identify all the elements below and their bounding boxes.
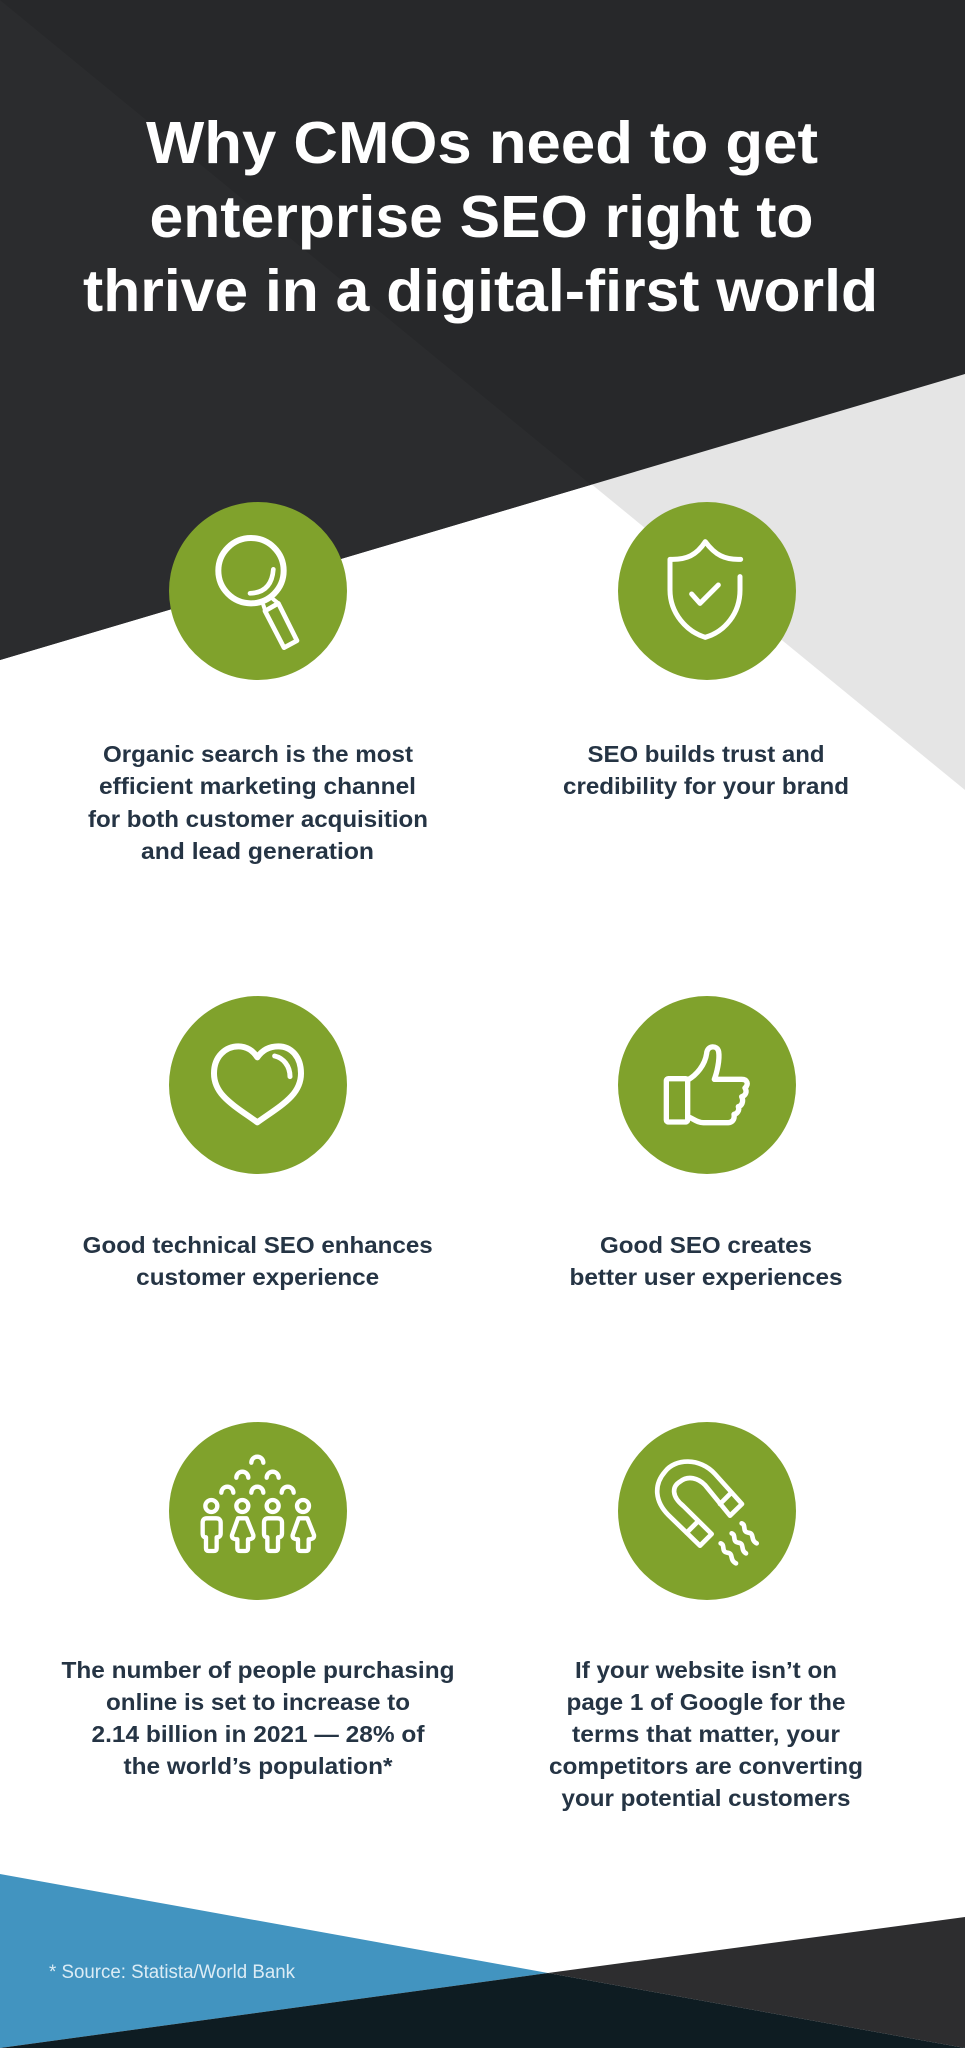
text: user experiences: better user experiences — [570, 1264, 842, 1290]
icon: thumbs up — [666, 1047, 747, 1123]
text: organic search — [88, 741, 428, 864]
text: organic search: Organic search is the most — [103, 741, 413, 767]
text: technical SEO: customer experience — [136, 1264, 379, 1290]
panel: organic search — [88, 502, 428, 864]
icon: magnifying glass — [218, 538, 297, 648]
panel: user experiences — [570, 996, 842, 1290]
text: technical SEO: Good technical SEO enhances — [83, 1232, 433, 1258]
title: Why CMOs need to get — [146, 110, 818, 176]
source note: * Source: Statista/World Bank — [49, 1962, 295, 1983]
text: organic search: and lead generation — [141, 838, 374, 864]
title: thrive in a digital-first world — [83, 258, 878, 324]
text: Google page 1: competitors are converting — [549, 1753, 863, 1779]
text: Google page 1: If your website isn’t on — [575, 1657, 837, 1683]
text: user experiences: Good SEO creates — [600, 1232, 812, 1258]
panel: online purchasers — [62, 1422, 454, 1779]
text: online purchasers: online is set to increase to — [106, 1689, 410, 1715]
panel: trust and credibility — [563, 502, 849, 799]
text: trust and credibility: credibility for your brand — [563, 773, 849, 799]
text: Google page 1: terms that matter, your — [572, 1721, 840, 1747]
text: organic search: efficient marketing channel — [99, 773, 416, 799]
panel: Google page 1 — [549, 1422, 863, 1811]
text: trust and credibility — [563, 741, 849, 799]
text: user experiences — [570, 1232, 842, 1290]
icon: shield with check — [670, 542, 741, 637]
panel: technical SEO — [83, 996, 433, 1290]
icon: magnet — [657, 1462, 757, 1563]
text: online purchasers — [62, 1657, 454, 1779]
text: online purchasers: The number of people purchasing — [62, 1657, 454, 1683]
title — [83, 110, 878, 324]
text: trust and credibility: SEO builds trust and — [588, 741, 824, 767]
title: enterprise SEO right to — [150, 184, 814, 250]
text: Google page 1: your potential customers — [562, 1785, 850, 1811]
text: Google page 1: page 1 of Google for the — [566, 1689, 846, 1715]
footer background — [0, 1874, 965, 2048]
icon: group of people — [203, 1457, 314, 1551]
header background — [0, 0, 965, 790]
text: organic search: for both customer acquisition — [88, 806, 428, 832]
text: Google page 1 — [549, 1657, 863, 1811]
text: online purchasers: the world’s population* — [124, 1753, 393, 1779]
text: technical SEO — [83, 1232, 433, 1290]
icon: heart — [214, 1046, 301, 1122]
text: online purchasers: 2.14 billion in 2021 — 28% of — [92, 1721, 425, 1747]
